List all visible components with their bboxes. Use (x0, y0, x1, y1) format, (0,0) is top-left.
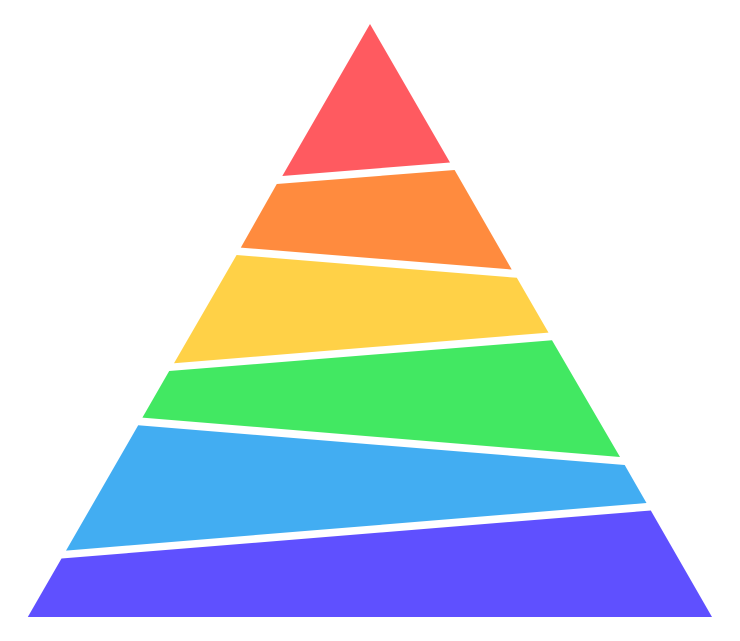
green tier (142, 340, 620, 457)
yellow tier (174, 255, 548, 363)
indigo base tier (28, 510, 712, 617)
orange tier (241, 170, 512, 270)
red top tier (282, 24, 450, 176)
blue tier (66, 425, 646, 551)
